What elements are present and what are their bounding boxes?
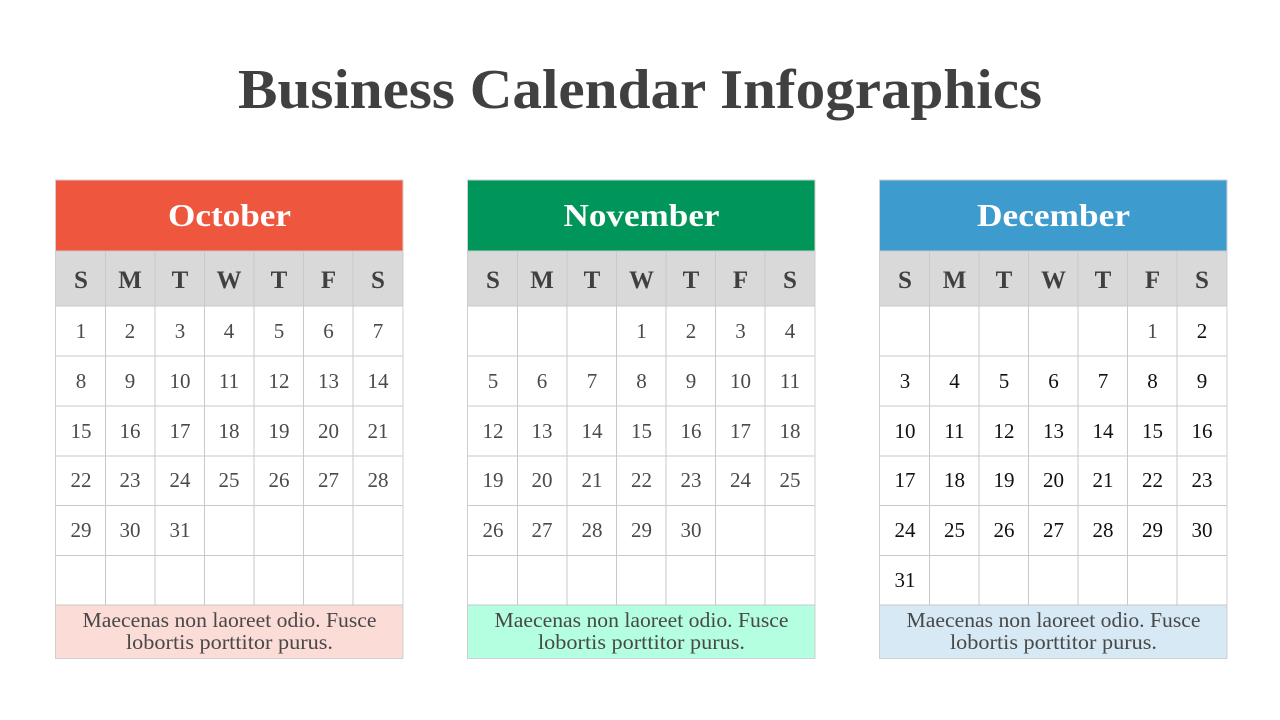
- December weekday row: [880, 251, 1227, 306]
- October caption: Maecenas non laoreet odio. Fusce: [82, 608, 376, 632]
- November date grid: 14: [582, 419, 603, 443]
- December date grid: 15: [1142, 419, 1163, 443]
- October date grid: 22: [70, 468, 92, 492]
- October header: [56, 180, 403, 251]
- December weekday row: F: [1145, 267, 1160, 294]
- October date grid: 7: [373, 319, 383, 343]
- November date grid: 18: [780, 419, 800, 443]
- November date grid: 2: [686, 319, 696, 343]
- October date grid: 27: [318, 468, 339, 492]
- December weekday row: M: [943, 267, 966, 294]
- October date grid: 18: [218, 419, 240, 443]
- November date grid: 6: [537, 369, 547, 393]
- December date grid: 9: [1197, 369, 1207, 393]
- December date grid: 23: [1192, 468, 1212, 492]
- October date grid: 10: [170, 369, 190, 393]
- November date grid: 11: [780, 369, 800, 393]
- October weekday row: S: [74, 267, 88, 294]
- December date grid: 22: [1142, 468, 1163, 492]
- November date grid: 16: [680, 419, 702, 443]
- November date grid: 27: [532, 518, 552, 542]
- October date grid: [70, 319, 389, 542]
- December date grid: 3: [900, 369, 910, 393]
- November weekday row: [468, 251, 815, 306]
- October weekday row: T: [172, 267, 189, 294]
- December weekday row: S: [898, 267, 912, 294]
- December date grid: 8: [1147, 369, 1158, 393]
- December date grid: 1: [1147, 319, 1158, 343]
- December date grid: 4: [949, 369, 960, 393]
- December date grid: 25: [944, 518, 965, 542]
- October weekday row: S: [371, 267, 385, 294]
- November date grid: 1: [636, 319, 647, 343]
- October date grid: 3: [175, 319, 185, 343]
- October date grid: 6: [323, 319, 334, 343]
- December date grid: 7: [1098, 369, 1108, 393]
- November weekday row: F: [733, 267, 748, 294]
- panel: October calendar: [56, 180, 403, 658]
- November weekday row: S: [783, 267, 797, 294]
- December date grid: 17: [894, 468, 916, 492]
- December caption: [880, 605, 1227, 658]
- December weekday row: S: [1195, 267, 1209, 294]
- December date grid: 13: [1043, 419, 1064, 443]
- October date grid: 28: [368, 468, 388, 492]
- October date grid: 31: [170, 518, 190, 542]
- November date grid: 13: [532, 419, 552, 443]
- November date grid: 26: [482, 518, 504, 542]
- October caption: [56, 605, 403, 658]
- October date grid: 25: [218, 468, 240, 492]
- December date grid: 19: [994, 468, 1014, 492]
- October weekday row: M: [118, 267, 142, 294]
- October date grid: 5: [274, 319, 284, 343]
- November date grid: 7: [587, 369, 597, 393]
- November date grid: 3: [735, 319, 746, 343]
- October date grid: 2: [125, 319, 135, 343]
- November date grid: 21: [582, 468, 602, 492]
- December caption: Maecenas non laoreet odio. Fusce: [906, 608, 1200, 632]
- October weekday row: [56, 251, 403, 306]
- November weekday row: T: [584, 267, 601, 294]
- December date grid: 30: [1192, 518, 1212, 542]
- December date grid: [894, 319, 1212, 592]
- November date grid: 9: [686, 369, 696, 393]
- November weekday row: W: [629, 267, 654, 294]
- December date grid: 10: [894, 419, 916, 443]
- October date grid: 17: [170, 419, 190, 443]
- October weekday row: W: [216, 267, 242, 294]
- December date grid: 12: [994, 419, 1014, 443]
- November date grid: 17: [730, 419, 751, 443]
- October date grid: 1: [76, 319, 86, 343]
- October caption: lobortis porttitor purus.: [126, 630, 333, 654]
- December date grid: 28: [1092, 518, 1114, 542]
- November caption: Maecenas non laoreet odio. Fusce: [494, 608, 788, 632]
- October header: October: [168, 197, 291, 233]
- November weekday row: S: [486, 267, 500, 294]
- November header: [468, 180, 815, 251]
- November date grid: 19: [482, 468, 504, 492]
- November weekday row: M: [530, 267, 554, 294]
- October date grid: 19: [268, 419, 290, 443]
- October date grid: 4: [224, 319, 235, 343]
- November caption: [468, 605, 815, 658]
- November date grid: 22: [631, 468, 652, 492]
- panel: November calendar: [468, 180, 815, 658]
- October date grid: 26: [268, 468, 290, 492]
- October date grid: 23: [120, 468, 140, 492]
- December date grid: 29: [1142, 518, 1163, 542]
- December header: December: [977, 197, 1130, 233]
- December date grid: 16: [1192, 419, 1212, 443]
- October date grid: 14: [368, 369, 389, 393]
- November header: November: [564, 197, 720, 233]
- November date grid: 8: [636, 369, 647, 393]
- November date grid: 15: [631, 419, 652, 443]
- October date grid: 24: [170, 468, 191, 492]
- October date grid: 20: [318, 419, 339, 443]
- October date grid: 29: [70, 518, 92, 542]
- title: Business Calendar Infographics: [238, 59, 1042, 121]
- December date grid: 31: [894, 568, 916, 592]
- November date grid: [482, 319, 800, 542]
- November date grid: 30: [680, 518, 702, 542]
- panel: December calendar: [880, 180, 1227, 658]
- November date grid: 25: [780, 468, 800, 492]
- October date grid: 11: [219, 369, 239, 393]
- November date grid: 4: [785, 319, 796, 343]
- October date grid: 12: [268, 369, 290, 393]
- October date grid: 9: [125, 369, 135, 393]
- October date grid: 15: [70, 419, 92, 443]
- October date grid: 21: [368, 419, 388, 443]
- November date grid: 28: [582, 518, 602, 542]
- December date grid: 2: [1197, 319, 1207, 343]
- December caption: lobortis porttitor purus.: [950, 630, 1157, 654]
- November date grid: 23: [680, 468, 702, 492]
- December weekday row: W: [1041, 267, 1066, 294]
- November date grid: 12: [482, 419, 504, 443]
- November date grid: 24: [730, 468, 752, 492]
- December date grid: 20: [1043, 468, 1064, 492]
- December date grid: 18: [944, 468, 965, 492]
- October date grid: 30: [120, 518, 140, 542]
- December date grid: 14: [1092, 419, 1114, 443]
- December header: [880, 180, 1227, 251]
- November date grid: 5: [488, 369, 498, 393]
- December date grid: 5: [999, 369, 1009, 393]
- November date grid: 10: [730, 369, 751, 393]
- December weekday row: T: [996, 267, 1013, 294]
- December date grid: 6: [1048, 369, 1059, 393]
- December date grid: 11: [944, 419, 965, 443]
- November caption: lobortis porttitor purus.: [538, 630, 745, 654]
- November date grid: 29: [631, 518, 652, 542]
- December date grid: 24: [894, 518, 916, 542]
- October date grid: 8: [76, 369, 86, 393]
- December date grid: 27: [1043, 518, 1064, 542]
- October date grid: 16: [120, 419, 140, 443]
- December weekday row: T: [1095, 267, 1112, 294]
- October weekday row: T: [271, 267, 288, 294]
- October weekday row: F: [321, 267, 336, 294]
- October date grid: 13: [318, 369, 339, 393]
- November date grid: 20: [532, 468, 552, 492]
- November weekday row: T: [683, 267, 700, 294]
- December date grid: 21: [1092, 468, 1114, 492]
- December date grid: 26: [994, 518, 1014, 542]
